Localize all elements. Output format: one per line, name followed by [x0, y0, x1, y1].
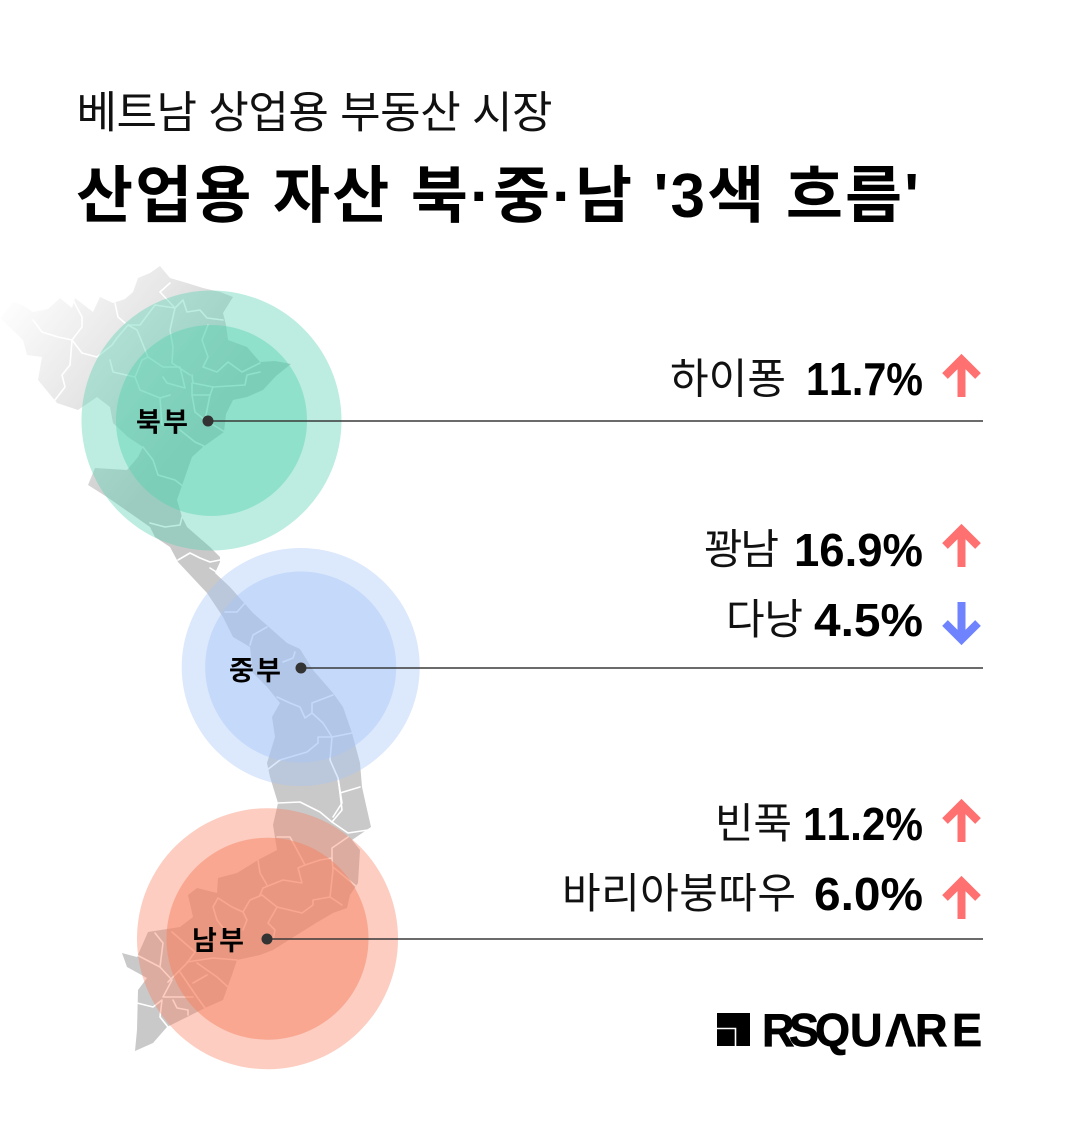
stat: Vinh Phuc: 빈푹 — [715, 800, 792, 847]
stat: Hai Phong: 11.7% — [806, 353, 923, 405]
circle: north region — [82, 290, 342, 550]
province borders — [33, 283, 368, 1027]
circle: central region — [182, 548, 420, 786]
stat: Quang Nam: 16.9% — [794, 524, 923, 576]
stat: Ba Ria Vung Tau: 6.0% — [814, 868, 923, 920]
stat: Vinh Phuc — [715, 798, 978, 850]
arrow up — [945, 804, 978, 842]
stat: Hai Phong: 하이퐁 — [670, 356, 786, 402]
stat: Quang Nam: 꽝남 — [704, 526, 779, 573]
stat: Hai Phong — [670, 353, 978, 405]
stat: Ba Ria Vung Tau: 바리아붕따우 — [562, 870, 796, 917]
region label: central: 중부 — [229, 656, 281, 686]
stat: Da Nang — [726, 594, 978, 646]
logo mark — [717, 1013, 750, 1046]
stat: Vinh Phuc: 11.2% — [803, 798, 923, 850]
stat: Quang Nam — [704, 524, 978, 576]
title: 산업용 자산 북·중·남 '3색 흐름' — [76, 162, 919, 231]
arrow down — [945, 602, 978, 640]
leader line: central — [296, 662, 983, 674]
subtitle: 베트남 상업용 부동산 시장 — [76, 88, 552, 138]
arrow up — [945, 360, 978, 397]
logo: RSQUARE — [717, 1005, 982, 1056]
country silhouette — [0, 266, 371, 1051]
stat: Da Nang: 다낭 — [726, 596, 803, 643]
leader line: north — [202, 416, 983, 426]
map of Vietnam — [0, 266, 371, 1051]
region label: north: 북부 — [136, 408, 188, 438]
circle: south region — [137, 808, 398, 1069]
stat: Ba Ria Vung Tau — [562, 868, 978, 920]
header — [76, 88, 919, 231]
region label: south: 남부 — [192, 926, 244, 956]
arrow up — [945, 530, 978, 567]
logo wordmark: RSQUARE — [762, 1005, 982, 1056]
leader line: south — [262, 934, 983, 944]
stat: Da Nang: 4.5% — [814, 594, 923, 646]
arrow up — [945, 882, 978, 919]
